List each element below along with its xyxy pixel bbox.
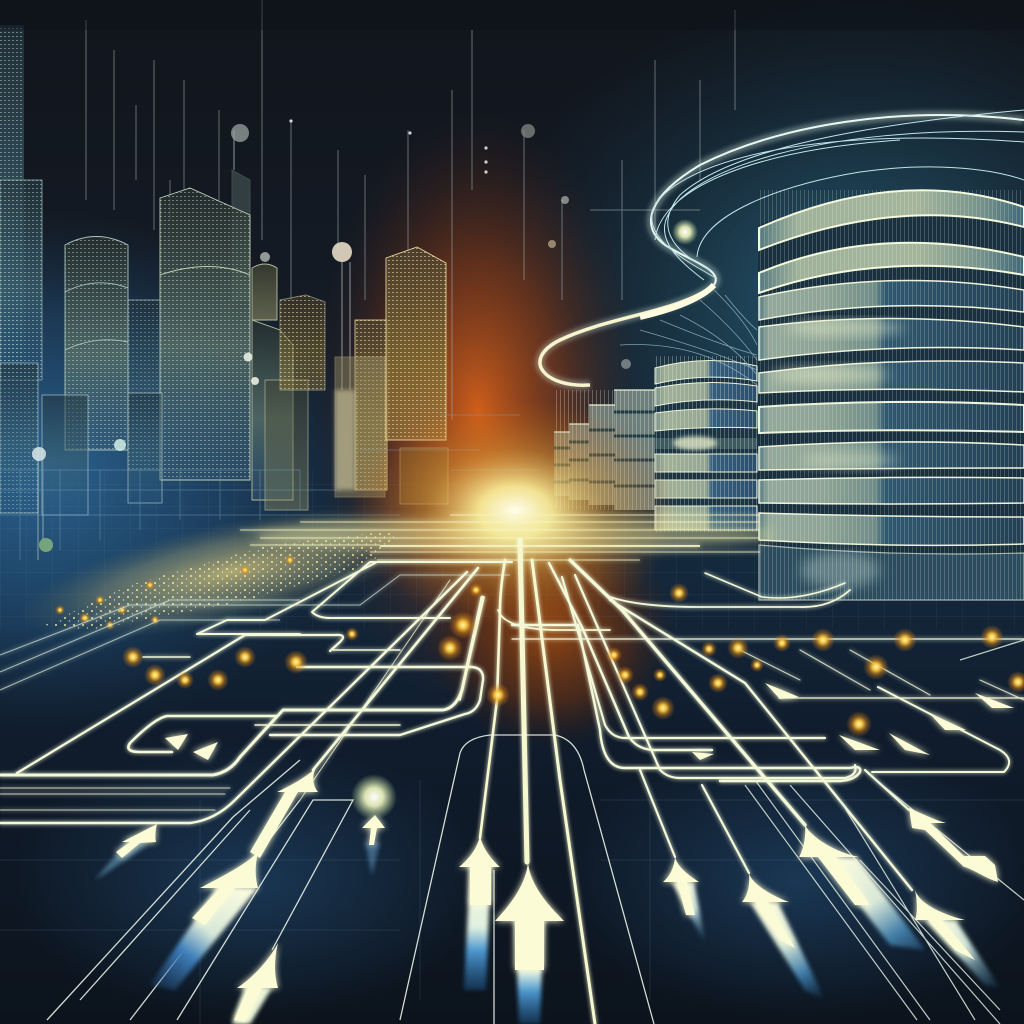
thin floor lines right bbox=[745, 640, 1024, 1024]
thin floor lines left bbox=[47, 735, 654, 1024]
amber node lights bbox=[122, 583, 1024, 737]
large cylinder bbox=[758, 190, 1024, 600]
thin vertical data lines in the sky bbox=[38, 0, 735, 560]
skyline: blue and golden buildings bbox=[0, 25, 540, 560]
horizontal light band into the burst bbox=[0, 515, 760, 690]
top edge shade bbox=[0, 0, 1024, 30]
circuit lines centre bbox=[460, 540, 610, 1024]
wide central tower bbox=[160, 188, 250, 480]
skyline base wash bbox=[0, 415, 540, 560]
mid tiered towers bbox=[252, 264, 325, 510]
lower left blocks bbox=[0, 300, 162, 515]
city light orbs bbox=[32, 119, 631, 552]
small distant cylinders bbox=[554, 390, 655, 510]
central light burst bbox=[255, 397, 775, 627]
back slim tube tower bbox=[232, 170, 250, 300]
swirling data ribbon bbox=[540, 110, 1024, 385]
arrow tails bbox=[95, 838, 1000, 1024]
circuit lines left bbox=[0, 562, 512, 823]
round tower bbox=[65, 236, 128, 450]
arrow heads bbox=[116, 683, 1014, 1022]
left stepped tower bbox=[0, 180, 42, 380]
gold cluster front bbox=[335, 320, 387, 497]
tallest golden tower bbox=[386, 247, 448, 504]
arrows with blue light trails bbox=[95, 683, 1014, 1024]
mid cylinder bbox=[655, 356, 757, 532]
circuit lines right bbox=[512, 560, 1024, 890]
glowing white orb bbox=[351, 774, 397, 820]
database cylinder stacks bbox=[554, 190, 1024, 600]
glowing dotted field on the left bbox=[9, 478, 451, 666]
far left tower bbox=[0, 25, 24, 365]
